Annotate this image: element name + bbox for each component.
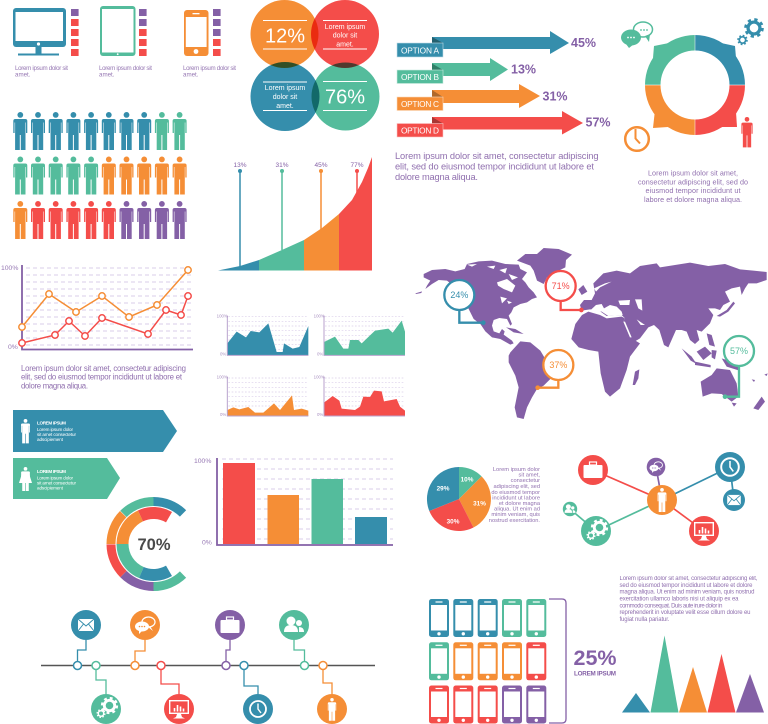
venn diagram: four overlapping circles: amet. bbox=[336, 42, 354, 48]
text: paragraph next to pie bbox=[489, 467, 541, 524]
arrow: option B 13% bbox=[397, 58, 536, 84]
text: paragraph under line chart: Lorem ipsum dolor sit amet, consectetur adipiscing bbox=[21, 364, 186, 373]
chart: rising curve area with percentage pins bbox=[218, 157, 372, 270]
banner: male statistic bbox=[13, 410, 177, 452]
text: paragraph under donut: labore et dolore magna aliqua. bbox=[644, 195, 742, 204]
text: paragraph above triangle chart: Lorem ipsum dolor sit amet, consectetur adipiscing elit, bbox=[620, 576, 758, 582]
venn diagram: four overlapping circles bbox=[250, 0, 380, 131]
text: paragraph next to pie: consectetur bbox=[511, 478, 540, 484]
node: briefcase bbox=[215, 610, 245, 640]
chart: rising curve area with percentage pins: 77% bbox=[350, 162, 364, 169]
text: paragraph under donut: eiusmod tempor incididunt ut bbox=[646, 186, 740, 195]
banner: female statistic: Lorem ipsum dolor bbox=[37, 476, 73, 480]
banner: female statistic bbox=[13, 458, 120, 499]
area chart: orange: 0% bbox=[220, 412, 226, 417]
text: device captions: Lorem ipsum dolor sit bbox=[15, 65, 68, 72]
area chart: blue: 100% bbox=[217, 314, 228, 319]
text: device captions bbox=[15, 65, 236, 78]
line chart: two series: 0% bbox=[8, 344, 18, 351]
text: device captions: amet. bbox=[99, 72, 115, 78]
node: person bbox=[317, 694, 347, 724]
node: people bbox=[279, 610, 309, 640]
pin: 71%: 71% bbox=[552, 281, 570, 291]
icon: chat bubbles bbox=[621, 22, 652, 48]
venn diagram: four overlapping circles: Lorem ipsum bbox=[325, 24, 365, 31]
arrow: option C 31%: OPTION C bbox=[401, 99, 439, 109]
text: paragraph above triangle chart: fugiat nulla pariatur. bbox=[620, 617, 670, 623]
text: paragraph next to pie: Lorem ipsum dolor bbox=[493, 467, 540, 473]
pie chart: 30% bbox=[447, 518, 460, 526]
banner: female statistic: adscipiement bbox=[37, 486, 64, 490]
banner: male statistic: Lorem ipsum dolor bbox=[37, 427, 73, 432]
area chart: green: 0% bbox=[317, 351, 323, 356]
area chart: blue bbox=[217, 314, 308, 356]
arrow: option A 45% bbox=[397, 31, 596, 57]
pictogram: grid of fifteen phones bbox=[429, 599, 546, 724]
text: paragraph next to pie: et dolore magna bbox=[499, 501, 541, 507]
network diagram bbox=[563, 452, 745, 546]
chart: rising curve area with percentage pins: 45% bbox=[314, 162, 328, 169]
venn diagram: four overlapping circles: Lorem ipsum bbox=[265, 85, 305, 92]
icon: person bbox=[741, 117, 753, 147]
text: paragraph above triangle chart: commodo consequat. Duis aute irure dolor in bbox=[620, 604, 722, 610]
text: paragraph above triangle chart: sed do eiusmod tempor incididunt ut labore et dolore bbox=[620, 583, 753, 589]
pin: 57%: 57% bbox=[730, 346, 748, 356]
pin: 71% bbox=[546, 271, 584, 312]
text: device captions: Lorem ipsum dolor sit bbox=[183, 65, 236, 72]
area chart: green bbox=[314, 314, 405, 356]
icon: clock bbox=[625, 127, 649, 151]
text: paragraph under line chart: elit, sed do eiusmod tempor incididunt ut labore et bbox=[21, 373, 183, 382]
text: paragraph next to pie: incididunt ut labore bbox=[492, 495, 540, 501]
node: chat bbox=[130, 610, 160, 640]
text: device captions: Lorem ipsum dolor sit bbox=[99, 65, 152, 72]
text: paragraph above triangle chart: magna aliqua. Ut enim ad minim veniam, quis nostrud bbox=[620, 590, 754, 596]
area chart: blue: 0% bbox=[220, 351, 226, 356]
pin: 24%: 24% bbox=[450, 290, 468, 300]
text: paragraph under arrows: dolore magna aliqua. bbox=[395, 172, 478, 182]
area chart: red: 100% bbox=[314, 375, 325, 380]
area chart: orange: 100% bbox=[217, 375, 228, 380]
text: paragraph under line chart: dolore magna aliqua. bbox=[21, 381, 88, 390]
pie chart: 29% bbox=[437, 486, 450, 492]
timeline with icon nodes bbox=[41, 610, 375, 724]
pie chart bbox=[427, 467, 491, 531]
arrow: option C 31% bbox=[397, 84, 568, 110]
node: gears bbox=[91, 694, 121, 724]
text: paragraph under arrows: elit, sed do eiusmod tempor incididunt ut labore et bbox=[395, 162, 594, 172]
small area charts bbox=[217, 314, 405, 417]
banner: male statistic: adscipiement bbox=[37, 437, 64, 442]
node: monitor chart bbox=[164, 694, 194, 724]
pin: 57% bbox=[723, 336, 754, 399]
arrow: option A 45%: OPTION A bbox=[401, 46, 439, 56]
bar chart: 0% bbox=[202, 540, 212, 546]
arrow: option B 13%: 13% bbox=[511, 62, 536, 76]
text: paragraph under donut: Lorem ipsum dolor sit amet, bbox=[648, 168, 738, 178]
banner: male statistic: sit amet consectetur bbox=[37, 432, 76, 437]
node: mail bbox=[71, 610, 101, 640]
radial chart: 70%: 70% bbox=[137, 536, 171, 554]
text: paragraph under line chart bbox=[21, 364, 186, 390]
bracket bbox=[549, 599, 566, 723]
world map with percentage pins bbox=[415, 248, 768, 419]
map: the Americas and Greenland bbox=[415, 248, 572, 419]
stat: 25% lorem ipsum: 25% bbox=[574, 646, 617, 670]
node: clock bbox=[243, 694, 273, 724]
venn diagram: four overlapping circles: 12% bbox=[265, 26, 305, 48]
text: paragraph under donut bbox=[638, 168, 748, 204]
venn diagram: four overlapping circles: amet. bbox=[276, 103, 294, 110]
icon: gears bbox=[738, 20, 762, 45]
text: paragraph above triangle chart: reprehenderit in voluptate velit esse cillum dolore eu bbox=[620, 610, 750, 616]
icon: desktop monitor with rating squares bbox=[13, 8, 79, 56]
text: device captions: amet. bbox=[183, 72, 199, 78]
text: paragraph next to pie: nostrud exercitation. bbox=[489, 518, 540, 524]
chart: rising curve area with percentage pins: 31% bbox=[275, 162, 289, 169]
area chart: red: 0% bbox=[317, 412, 323, 417]
arrow: option B 13%: OPTION B bbox=[401, 72, 439, 82]
map: Europe, Africa, Asia and Oceania bbox=[571, 263, 768, 410]
area chart: orange bbox=[217, 375, 308, 417]
text: paragraph under arrows: Lorem ipsum dolor sit amet, consectetur adipiscing bbox=[395, 151, 598, 161]
text: paragraph above triangle chart bbox=[620, 576, 758, 623]
banner: male statistic: LOREM IPSUM bbox=[37, 420, 66, 426]
text: paragraph next to pie: do eiusmod tempor bbox=[491, 490, 540, 496]
banner: female statistic: sit amet consectetur bbox=[37, 480, 76, 486]
pie chart: 10% bbox=[461, 476, 474, 484]
line chart: two series bbox=[1, 265, 193, 351]
icon: tablet with rating squares bbox=[100, 6, 147, 56]
venn diagram: four overlapping circles: dolor sit bbox=[333, 32, 357, 40]
pie chart: 31% bbox=[473, 500, 486, 508]
banner: female statistic: LOREM IPSUM bbox=[37, 469, 66, 474]
area chart: green: 100% bbox=[314, 314, 325, 319]
venn diagram: four overlapping circles: dolor sit bbox=[273, 94, 297, 101]
text: paragraph next to pie: minim veniam, quis bbox=[491, 512, 540, 518]
text: paragraph under arrows bbox=[395, 151, 598, 182]
arrow: option D 57% bbox=[397, 111, 611, 137]
pictogram: grid of thirty people bbox=[13, 112, 187, 239]
triangle chart bbox=[622, 636, 764, 712]
text: device captions: amet. bbox=[15, 72, 31, 78]
pin: 37%: 37% bbox=[549, 360, 567, 370]
donut chart with corner icons bbox=[621, 20, 762, 151]
area chart: red bbox=[314, 375, 405, 417]
chart: rising curve area with percentage pins: 13% bbox=[233, 162, 247, 169]
text: paragraph above triangle chart: exercitation ullamco laboris nisi ut aliquip ex ea bbox=[620, 596, 739, 602]
pin: 37% bbox=[535, 350, 573, 390]
bar chart: 100% bbox=[194, 458, 211, 465]
arrow: option A 45%: 45% bbox=[571, 36, 596, 50]
arrow: option D 57%: OPTION D bbox=[401, 126, 439, 136]
venn diagram: four overlapping circles: 76% bbox=[325, 86, 365, 108]
text: paragraph under donut: consectetur adipiscing elit, sed do bbox=[638, 178, 748, 186]
line chart: two series: 100% bbox=[1, 265, 18, 272]
text: paragraph next to pie: sit amet, bbox=[518, 472, 540, 478]
arrow chart: options A to D bbox=[397, 31, 611, 137]
pin: 24% bbox=[444, 280, 486, 325]
arrow: option D 57%: 57% bbox=[586, 116, 611, 130]
stat: 25% lorem ipsum: LOREM IPSUM bbox=[574, 670, 616, 678]
radial chart: 70% bbox=[93, 484, 214, 604]
text: paragraph next to pie: aliqua. Ut enim ad bbox=[494, 506, 540, 512]
icon: smartphone with rating squares bbox=[184, 9, 221, 56]
text: paragraph next to pie: adipiscing elit, sed bbox=[494, 484, 540, 490]
arrow: option C 31%: 31% bbox=[542, 90, 568, 104]
bar chart bbox=[194, 458, 393, 546]
